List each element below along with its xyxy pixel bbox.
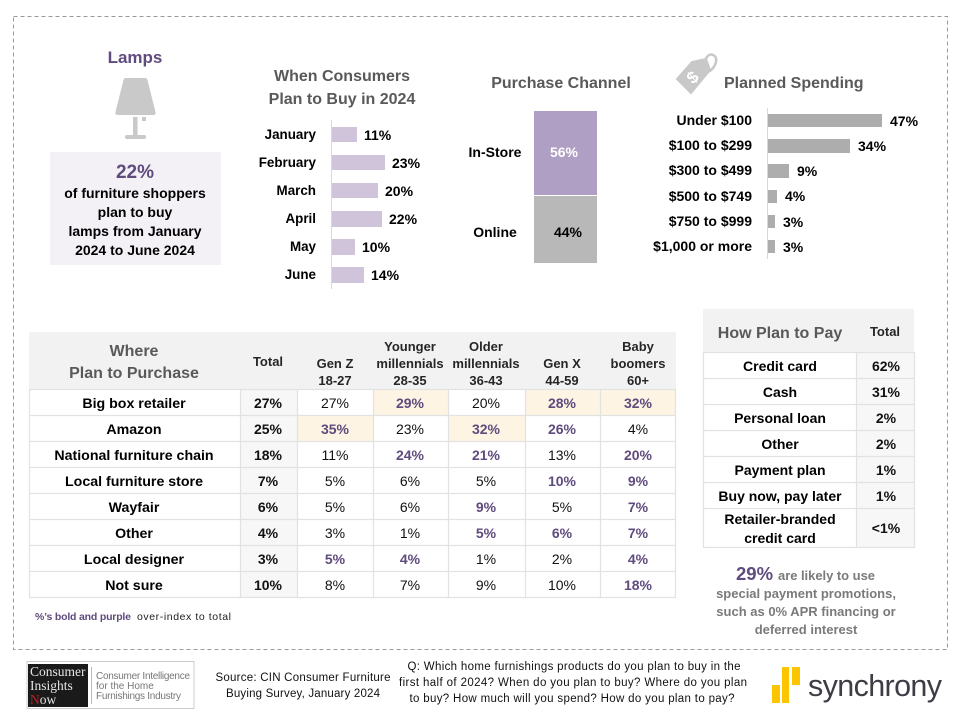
table header: Older [469,339,503,354]
pay table header: How Plan to Pay [718,325,842,342]
logo: consumer insights now [27,662,194,708]
pay rows: credit card [744,530,816,546]
pay rows [718,358,901,546]
row: not sure: 8% [325,577,345,593]
row: other: 5% [476,525,497,541]
row: local designer: 4% [628,551,649,567]
callout: 29% special promotions [716,563,896,637]
bar chart: spending: 9% [797,163,818,179]
row: other: 7% [628,525,649,541]
table header: Total [253,354,283,369]
pay rows: Cash [763,384,797,400]
callout box: 22%: 2024 to June 2024 [75,242,195,258]
pay rows: Buy now, pay later [718,488,842,504]
logo: consumer insights now: for the Home [96,681,154,692]
bar chart: months: January [265,127,317,142]
pay rows: 1% [876,488,897,504]
callout box: 22%: of furniture shoppers [64,185,206,201]
row: other: Other [115,526,153,542]
row: wayfair [109,499,649,516]
bar chart: months: 11% [364,127,392,143]
table header: 44-59 [545,373,579,388]
bar chart: spending: $750 to $999 [669,213,752,229]
logo: consumer insights now: Furnishings Industry [96,691,181,702]
row: big box retailer: 32% [624,395,653,411]
pay rows: <1% [872,520,901,536]
row: not sure: 10% [254,577,283,593]
row: local furniture store: 9% [628,473,649,489]
bar chart: spending: 4% [785,188,806,204]
bar chart: months [259,120,421,289]
table header [69,339,665,388]
row: national furniture chain: National furniture chain [54,448,214,464]
row: other [115,525,649,542]
source text: Buying Survey, January 2024 [226,688,381,700]
table header: boomers [611,356,665,371]
pay table header [718,324,900,342]
bar chart: spending: $300 to $499 [669,162,752,178]
survey question text: Q: Which home furnishings products do you plan to buy in the [408,661,740,673]
callout: 29% special promotions: are likely to use [778,568,875,583]
row: amazon: 23% [396,421,424,437]
row: local designer [84,551,649,568]
row: amazon: Amazon [106,422,162,438]
row: wayfair: 5% [552,499,572,515]
icon: price tag: $ [683,67,703,88]
panel: planned spending [653,55,919,259]
heading: when consumers: Plan to Buy in 2024 [269,91,415,108]
row: national furniture chain: 18% [254,447,283,463]
pay rows: 62% [872,358,901,374]
bar chart: months: March [277,183,316,198]
row: local furniture store: 5% [476,473,496,489]
row: national furniture chain: 11% [322,447,348,463]
row: not sure: 9% [476,577,496,593]
row: national furniture chain: 21% [472,447,501,463]
row: local furniture store [65,473,649,490]
pay rows: 2% [876,436,897,452]
pay rows: 31% [872,384,901,400]
callout: 29% special promotions: deferred interest [755,622,858,637]
stacked bar: in-store and online: Online [473,224,517,240]
logo: consumer insights now: Consumer Intelligence [96,671,190,682]
row: amazon: 32% [472,421,501,437]
table header: millennials [376,356,444,371]
survey question text: first half of 2024? When do you plan to buy? Where do you plan [399,677,747,689]
table: where plan to purchase [29,332,676,598]
logo: consumer insights now: Insights [30,678,73,693]
icon: lamp [115,78,156,139]
bar chart: months: 23% [392,155,421,171]
callout box: 22%: lamps from January [68,223,202,239]
bar chart: spending [653,108,919,259]
bar chart: spending: 3% [783,214,804,230]
row: local furniture store: 7% [258,473,279,489]
table: how plan to pay [703,309,915,548]
row: not sure: 18% [624,577,653,593]
row: big box retailer: 27% [254,395,283,411]
heading: Lamps: Lamps [108,48,162,67]
row: not sure: 10% [548,577,576,593]
bar chart: months: 22% [389,211,418,227]
row: local furniture store: 10% [548,473,577,489]
row: amazon [106,421,648,438]
source text [216,672,390,700]
row: amazon: 35% [321,421,350,437]
bar chart: months: April [285,211,316,226]
row: not sure: 7% [400,577,420,593]
table header: Where [110,343,159,360]
callout: 29% special promotions: 29% [736,563,773,584]
row: wayfair: 9% [476,499,497,515]
row: big box retailer: 28% [548,395,577,411]
row: wayfair: 6% [400,499,420,515]
callout: 29% special promotions: such as 0% APR financing or [716,604,896,619]
stacked bar: in-store and online [469,111,597,263]
bar chart: spending: 3% [783,239,804,255]
bar chart: spending: 47% [890,113,919,129]
callout box: 22% [50,152,221,265]
row: local designer: 5% [325,551,346,567]
row: other: 3% [325,525,345,541]
row: wayfair: 5% [325,499,345,515]
row: big box retailer: Big box retailer [82,396,186,412]
row: wayfair: Wayfair [109,500,160,516]
bar chart: spending: $500 to $749 [669,188,752,204]
table header: Younger [384,339,436,354]
table header: Plan to Purchase [69,365,199,382]
table header: Baby [622,339,655,354]
row: national furniture chain: 20% [624,447,653,463]
row: other: 6% [552,525,573,541]
row: amazon: 26% [548,421,577,437]
row: big box retailer: 29% [396,395,425,411]
survey question text [399,661,747,705]
callout box: 22%: plan to buy [98,204,173,220]
pay rows: 2% [876,410,897,426]
row: national furniture chain: 24% [396,447,425,463]
row: local designer: Local designer [84,552,185,568]
bar chart: months: 10% [362,239,391,255]
heading: planned spending: Planned Spending [724,75,864,92]
panel: lamps summary [50,48,221,265]
row: local furniture store: 6% [400,473,420,489]
logo: consumer insights now: Consumer [30,664,86,679]
bar chart: months: June [285,267,316,282]
row: amazon: 4% [628,421,648,437]
bar chart: spending: $100 to $299 [669,137,752,153]
bar chart: spending: 34% [858,138,887,154]
row: other: 4% [258,525,279,541]
row: not sure: Not sure [105,578,163,594]
table header: 36-43 [469,373,503,388]
bar chart: spending: $1,000 or more [653,238,752,254]
stacked bar: in-store and online: In-Store [469,144,522,160]
stacked bar: in-store and online: 44% [554,224,583,240]
row: big box retailer: 20% [472,395,500,411]
heading: purchase channel: Purchase Channel [491,75,631,92]
stacked bar: in-store and online: 56% [550,144,579,160]
callout: 29% special promotions: special payment promotions, [716,586,896,601]
table header: millennials [452,356,520,371]
note: over-index legend: %’s bold and purple [35,611,131,623]
table header: Gen Z [317,356,353,371]
bar chart: months: February [259,155,317,170]
note: over-index legend [35,611,231,623]
bar chart: spending: Under $100 [677,112,752,128]
row: local furniture store: Local furniture store [65,474,203,490]
heading: when consumers [269,68,415,108]
row: wayfair: 7% [628,499,649,515]
bar chart: months: May [290,239,317,254]
row: wayfair: 6% [258,499,279,515]
row: local furniture store: 5% [325,473,345,489]
table header: Gen X [543,356,581,371]
pay rows: Personal loan [734,410,826,426]
table header: 18-27 [318,373,352,388]
panel: when consumers plan to buy [259,68,421,289]
panel: purchase channel [469,75,631,263]
pay rows: Credit card [743,358,817,374]
row: big box retailer: 27% [321,395,349,411]
table header: 60+ [627,373,649,388]
pay rows: 1% [876,462,897,478]
survey question text: to buy? How much will you spend? How do you plan to pay? [410,693,734,705]
row: big box retailer [82,395,653,412]
row: local designer: 4% [400,551,421,567]
row: local designer: 1% [476,551,496,567]
logo: consumer insights now: Now [30,692,56,707]
note: over-index legend: over-index to total [137,611,231,623]
pay rows: Retailer-branded [724,511,836,527]
callout box: 22%: 22% [116,162,154,183]
table header: 28-35 [393,373,427,388]
source text: Source: CIN Consumer Furniture [216,672,390,684]
icon: price tag [677,55,716,93]
bar chart: months: 20% [385,183,414,199]
row: not sure [105,577,653,594]
heading: when consumers: When Consumers [274,68,410,85]
row: national furniture chain [54,447,653,464]
row: amazon: 25% [254,421,283,437]
pay rows: Other [761,436,799,452]
row: other: 1% [400,525,420,541]
logo: synchrony: synchrony [808,669,943,703]
row: national furniture chain: 13% [548,447,576,463]
row: local designer: 3% [258,551,279,567]
pay rows: Payment plan [734,462,826,478]
bar chart: months: 14% [371,267,400,283]
pay table header: Total [870,324,900,339]
row: local designer: 2% [552,551,572,567]
